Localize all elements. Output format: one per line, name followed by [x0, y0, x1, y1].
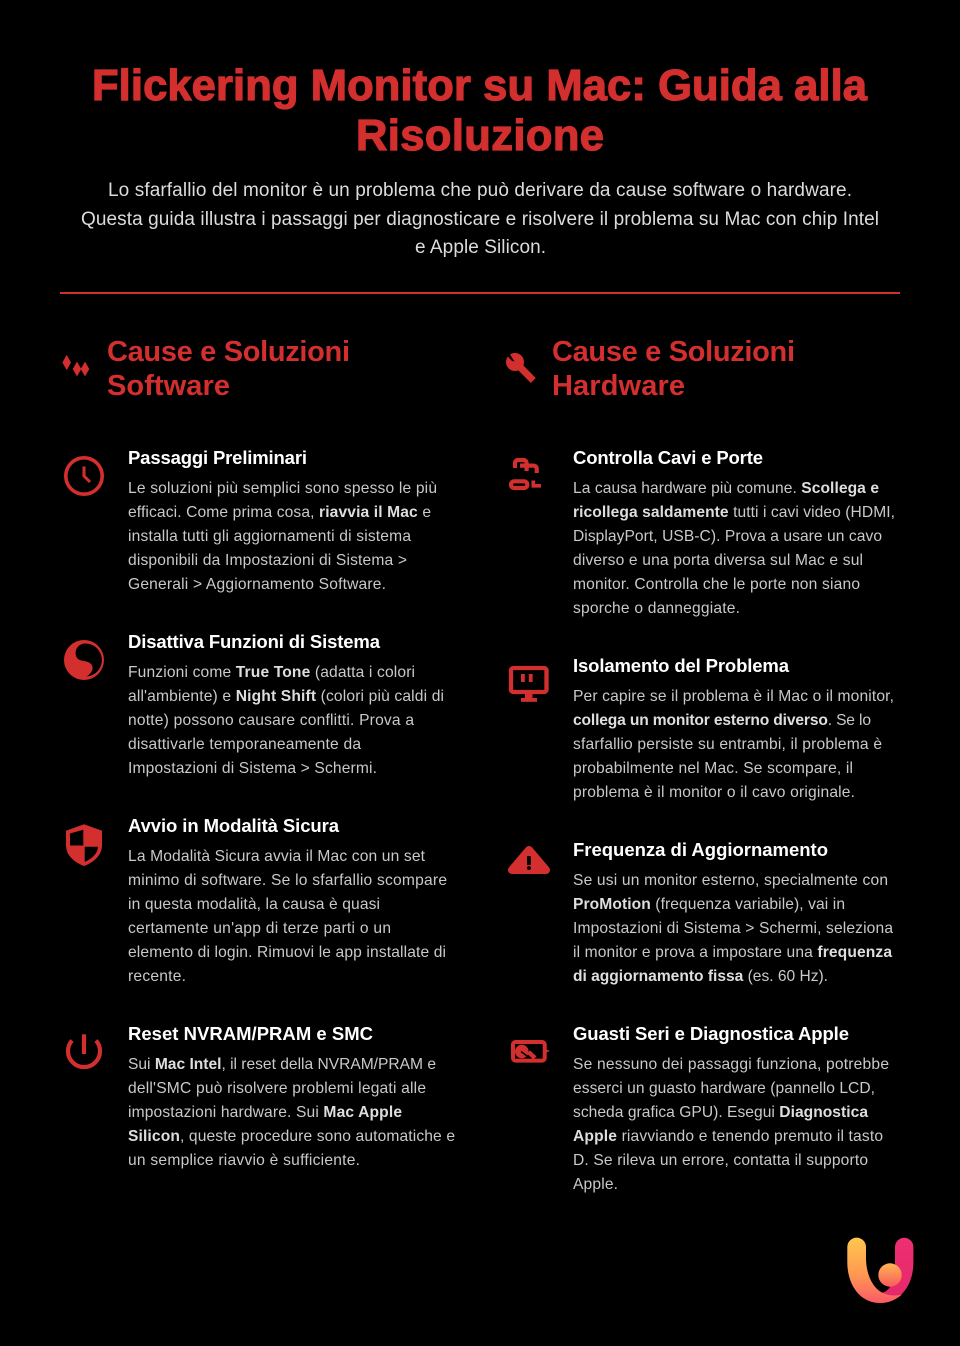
intro paragraph: Lo sfarfallio del monitor è un problema che può derivare da cause software o hardware.: [108, 180, 852, 201]
item: guasti seri e diagnostica apple: [573, 1023, 889, 1193]
item: reset nvram: [128, 1023, 455, 1169]
item: controlla cavi e porte: diverso e una porta diversa sul Mac e sul: [573, 552, 863, 569]
item: disattiva funzioni di sistema: [128, 631, 444, 777]
item: guasti seri e diagnostica apple: Guasti Seri e Diagnostica Apple: [573, 1023, 849, 1044]
item: frequenza di aggiornamento: [573, 839, 893, 985]
item: disattiva funzioni di sistema: Impostazioni di Sistema > Schermi.: [128, 760, 377, 777]
icon: damaged battery display: [513, 1042, 550, 1061]
item: disattiva funzioni di sistema: Disattiva Funzioni di Sistema: [128, 631, 381, 652]
item: passaggi preliminari: disponibili da Impostazioni di Sistema >: [128, 552, 407, 569]
item: passaggi preliminari: Passaggi Preliminari: [128, 447, 307, 468]
item: avvio in modalita sicura: elemento di login. Rimuovi le app installate di: [128, 944, 446, 961]
item: frequenza di aggiornamento: Se usi un monitor esterno, specialmente con: [573, 872, 888, 889]
heading: hardware: Hardware: [552, 370, 685, 402]
icon: clock: [66, 458, 102, 494]
title: [92, 62, 868, 160]
icon: monitor: [511, 668, 546, 702]
item: isolamento del problema: collega un monitor esterno diverso. Se lo: [573, 712, 871, 729]
heading: software: Cause e Soluzioni: [107, 336, 350, 368]
item: isolamento del problema: probabilmente nel Mac. Se scompare, il: [573, 760, 853, 777]
item: isolamento del problema: sfarfallio persiste su entrambi, il problema è: [573, 736, 882, 753]
panel: hardware causes and solutions: [505, 336, 895, 1193]
item: guasti seri e diagnostica apple: D. Se rileva un errore, contatta il supporto: [573, 1152, 868, 1169]
item: controlla cavi e porte: DisplayPort, USB-C). Prova a usare un cavo: [573, 528, 882, 545]
item: avvio in modalita sicura: minimo di software. Se lo sfarfallio scompare: [128, 872, 447, 889]
item: avvio in modalita sicura: Avvio in Modalità Sicura: [128, 815, 340, 836]
item: isolamento del problema: problema è il monitor o il cavo originale.: [573, 784, 855, 801]
item: guasti seri e diagnostica apple: Apple.: [573, 1176, 618, 1193]
item: isolamento del problema: [573, 655, 894, 801]
icon: yin yang: [64, 640, 104, 680]
item: reset nvram: Silicon, queste procedure sono automatiche e: [128, 1128, 455, 1145]
item: frequenza di aggiornamento: ProMotion (frequenza variabile), vai in: [573, 896, 845, 913]
intro paragraph: e Apple Silicon.: [415, 237, 546, 258]
item: frequenza di aggiornamento: di aggiornamento fissa (es. 60 Hz).: [573, 968, 828, 985]
item: controlla cavi e porte: ricollega saldamente tutti i cavi video (HDMI,: [573, 504, 895, 521]
item: reset nvram: un semplice riavvio è sufficiente.: [128, 1152, 360, 1169]
title: Risoluzione: [356, 112, 604, 160]
item: reset nvram: Reset NVRAM/PRAM e SMC: [128, 1023, 373, 1044]
item: isolamento del problema: Per capire se il problema è il Mac o il monitor,: [573, 688, 894, 705]
item: isolamento del problema: Isolamento del Problema: [573, 655, 790, 676]
icon: power: [68, 1034, 100, 1067]
item: guasti seri e diagnostica apple: Se nessuno dei passaggi funziona, potrebbe: [573, 1056, 889, 1073]
logo: [847, 1238, 913, 1303]
icon: cables: [511, 460, 541, 488]
item: avvio in modalita sicura: certamente un'app di terze parti o un: [128, 920, 391, 937]
item: avvio in modalita sicura: in questa modalità, la causa è quasi: [128, 896, 380, 913]
heading: software: Software: [107, 370, 230, 402]
icon: software diamonds: [63, 356, 89, 376]
item: frequenza di aggiornamento: Impostazioni di Sistema > Schermi, seleziona: [573, 920, 893, 937]
item: frequenza di aggiornamento: Frequenza di Aggiornamento: [573, 839, 828, 860]
item: controlla cavi e porte: monitor. Controlla che le porte non siano: [573, 576, 860, 593]
item: disattiva funzioni di sistema: notte) possono causare conflitti. Prova a: [128, 712, 414, 729]
item: reset nvram: dell'SMC può risolvere problemi legati alle: [128, 1080, 426, 1097]
item: avvio in modalita sicura: recente.: [128, 968, 186, 985]
item: frequenza di aggiornamento: il monitor e prova a impostare una frequenza: [573, 944, 892, 961]
icon: warning triangle: [512, 850, 546, 870]
item: guasti seri e diagnostica apple: Apple riavviando e tenendo premuto il tasto: [573, 1128, 883, 1145]
icon: shield: [66, 824, 102, 866]
heading: hardware: Cause e Soluzioni: [552, 336, 795, 368]
title: Flickering Monitor su Mac: Guida alla: [92, 62, 868, 110]
item: passaggi preliminari: Le soluzioni più semplici sono spesso le più: [128, 480, 437, 497]
heading: software: [107, 336, 350, 402]
item: avvio in modalita sicura: La Modalità Sicura avvia il Mac con un set: [128, 848, 426, 865]
item: controlla cavi e porte: Controlla Cavi e Porte: [573, 447, 763, 468]
item: avvio in modalita sicura: [128, 815, 447, 985]
icon: wrench: [505, 351, 533, 380]
panel: software causes and solutions: [63, 336, 455, 1169]
item: passaggi preliminari: Generali > Aggiornamento Software.: [128, 576, 386, 593]
intro paragraph: [81, 180, 879, 258]
item: guasti seri e diagnostica apple: esserci un guasto hardware (pannello LCD,: [573, 1080, 875, 1097]
item: controlla cavi e porte: La causa hardware più comune. Scollega e: [573, 480, 879, 497]
intro paragraph: Questa guida illustra i passaggi per diagnosticare e risolvere il problema su Mac con chip Intel: [81, 209, 879, 230]
item: reset nvram: Sui Mac Intel, il reset della NVRAM/PRAM e: [128, 1056, 436, 1073]
item: guasti seri e diagnostica apple: scheda grafica GPU). Esegui Diagnostica: [573, 1104, 868, 1121]
item: passaggi preliminari: installa tutti gli aggiornamenti di sistema: [128, 528, 411, 545]
item: passaggi preliminari: efficaci. Come prima cosa, riavvia il Mac e: [128, 504, 431, 521]
item: passaggi preliminari: [128, 447, 437, 593]
item: controlla cavi e porte: [573, 447, 895, 617]
heading: hardware: [552, 336, 795, 402]
item: controlla cavi e porte: sporche o danneggiate.: [573, 600, 740, 617]
item: disattiva funzioni di sistema: Funzioni come True Tone (adatta i colori: [128, 664, 415, 681]
item: reset nvram: impostazioni hardware. Sui Mac Apple: [128, 1104, 402, 1121]
item: disattiva funzioni di sistema: disattivarle temporaneamente da: [128, 736, 361, 753]
item: disattiva funzioni di sistema: all'ambiente) e Night Shift (colori più caldi di: [128, 688, 444, 705]
